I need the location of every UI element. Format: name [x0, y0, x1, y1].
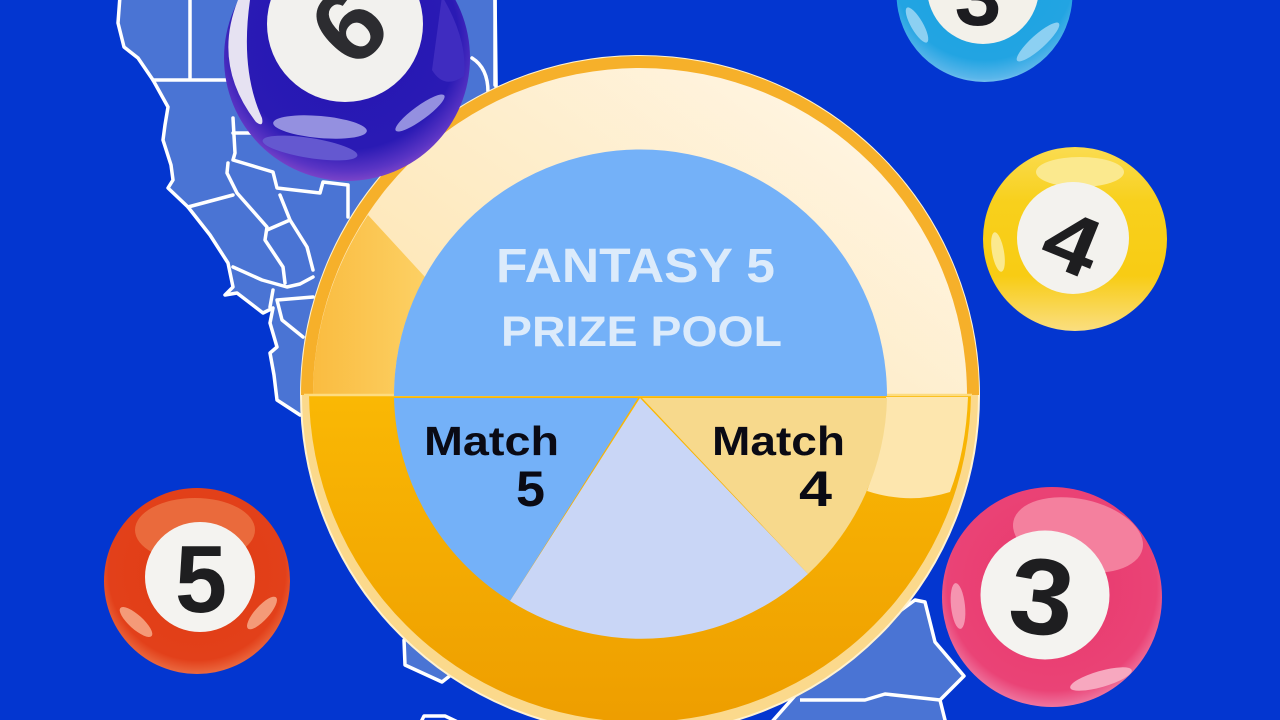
ball 3 top right: [896, 0, 1072, 82]
wheel rim: [301, 56, 979, 720]
ring right highlight: [867, 397, 968, 498]
label: match 5: 5: [516, 461, 545, 517]
prize pool wheel: [301, 56, 979, 720]
map: California counties upper: [118, 0, 500, 415]
label: match 5: [424, 418, 559, 517]
pie slice: remainder: [510, 398, 808, 639]
label: match 4: 4: [799, 461, 832, 517]
ring upper half: [313, 68, 967, 394]
ball 5: 5: [175, 526, 227, 633]
ball 4: [983, 147, 1167, 331]
label: match 4: Match: [712, 418, 845, 464]
blue upper semicircle: [394, 150, 887, 396]
map: lower counties: [404, 600, 964, 720]
label: match 5: Match: [424, 418, 559, 464]
ring upper left darker facet: [313, 215, 425, 395]
pie slice: match 4: [642, 398, 887, 574]
ball 4: 4: [1029, 189, 1115, 297]
ring lower half: [309, 396, 971, 720]
ball 6: [224, 0, 470, 181]
pie slice: match 5: [394, 398, 638, 601]
label: match 4: [712, 418, 845, 517]
heading: Fantasy 5: FANTASY 5: [496, 240, 775, 293]
ring divider: [304, 394, 972, 396]
heading: Prize Pool: PRIZE POOL: [501, 308, 782, 356]
ball 5: [104, 488, 290, 674]
ball 3 pink: 3: [1004, 533, 1080, 660]
ball 3 pink: [942, 486, 1162, 707]
